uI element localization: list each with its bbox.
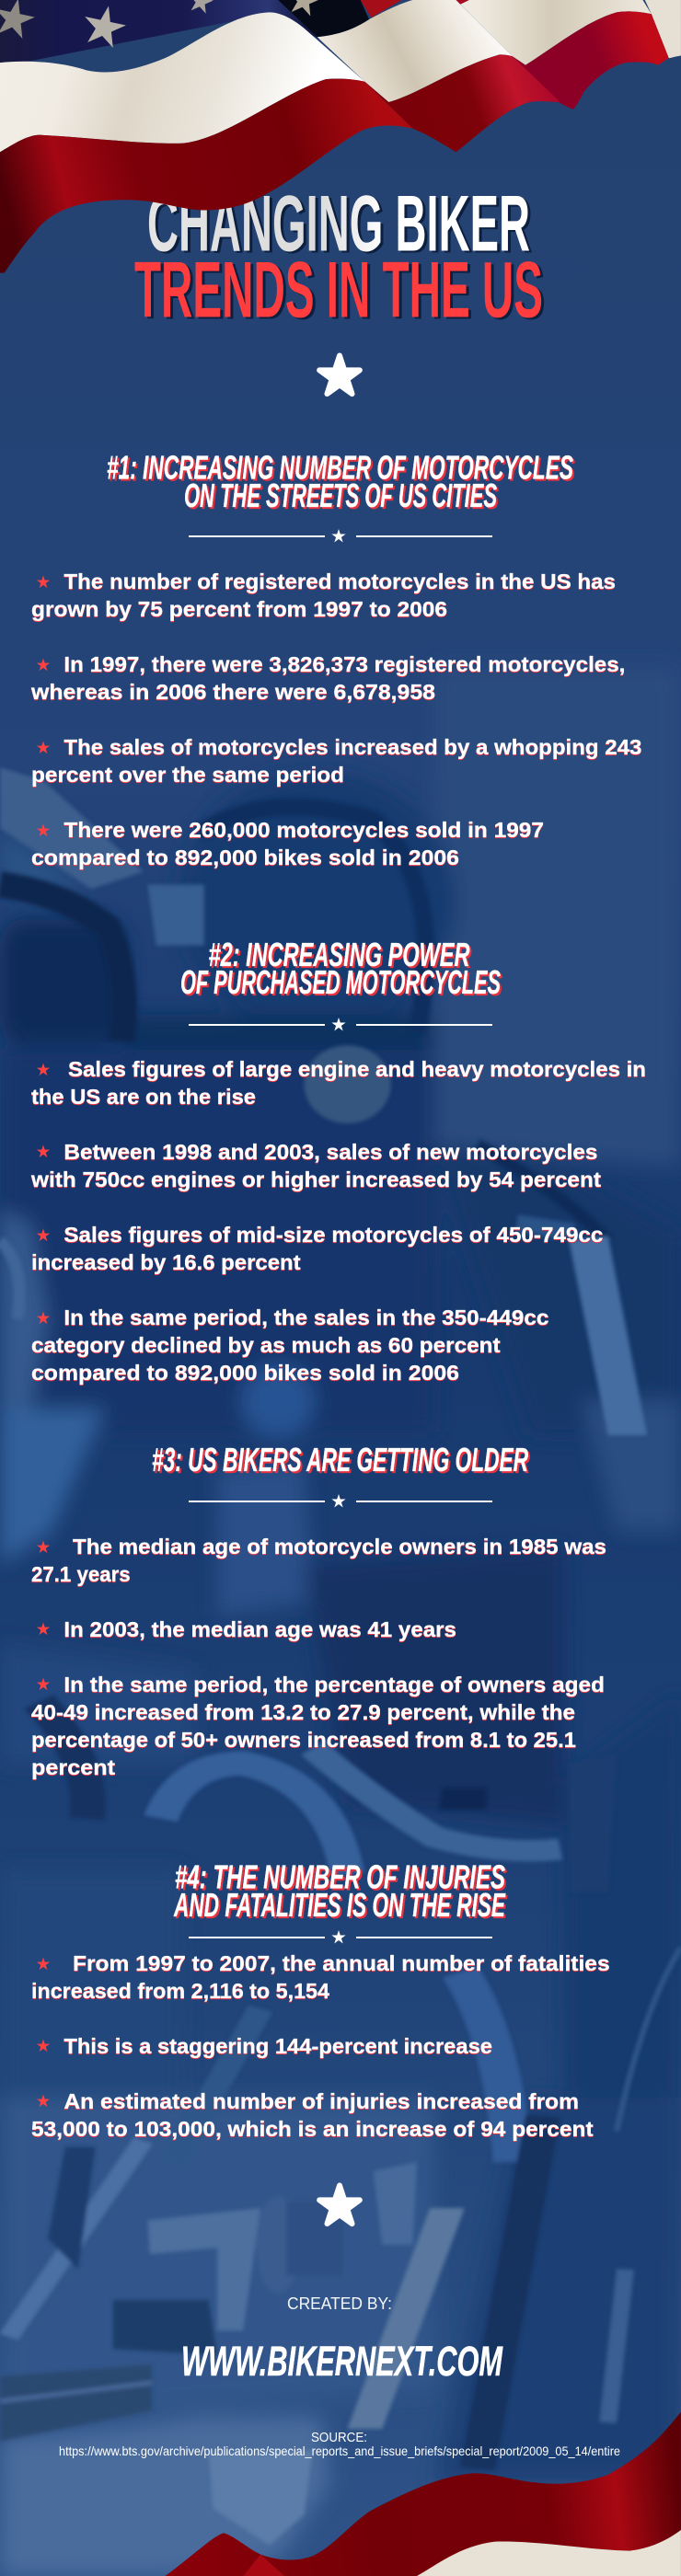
title [134,180,543,335]
heading 4: #4: THE NUMBER OF INJURIES [175,1858,505,1895]
source [59,2430,620,2458]
bullet 2.4: category declined by as much as 60 percent [31,1333,501,1357]
bullet 4.3: 53,000 to 103,000, which is an increase of 94 percent [31,2117,594,2141]
divider 1 [189,529,492,542]
bullet 1.3: The sales of motorcycles increased by a whopping 243 [63,735,641,759]
bullet 2.4: compared to 892,000 bikes sold in 2006 [31,1361,459,1385]
bullet 1.1: grown by 75 percent from 1997 to 2006 [31,597,447,621]
bullet 1.4 [31,818,544,869]
panel: section 4 [31,1858,610,2141]
heading 1 [107,449,573,514]
flag bottom banner [165,2412,681,2576]
big star bottom [319,2186,360,2224]
panel: section 3 [31,1441,606,1779]
bullet 2.4 [31,1305,548,1385]
bullet 1.4: compared to 892,000 bikes sold in 2006 [31,845,459,869]
bullet 1.3: percent over the same period [31,763,344,787]
bullet 1.4: There were 260,000 motorcycles sold in 1997 [63,818,544,842]
bullet 3.3: percentage of 50+ owners increased from 8.1 to 25.1 [31,1728,576,1752]
bullet 3.3: 40-49 increased from 13.2 to 27.9 percent, while the [31,1700,575,1724]
bullet 2.4: In the same period, the sales in the 350-449cc [63,1305,548,1329]
source: SOURCE: [311,2430,367,2445]
bullet 2.1: Sales figures of large engine and heavy motorcycles in [68,1057,646,1081]
heading 4 [173,1858,506,1924]
divider 2 [189,1018,492,1030]
bullet 3.3: percent [31,1755,115,1779]
bullet 2.2: with 750cc engines or higher increased by 54 percent [30,1167,601,1191]
bullet 4.2: This is a staggering 144-percent increase [63,2034,492,2058]
source: https://www.bts.gov/archive/publications/special_reports_and_issue_briefs/special_report/2009_05_14/entire [59,2444,620,2458]
bullet 1.2: In 1997, there were 3,826,373 registered motorcycles, [63,652,625,676]
bullet 2.1: the US are on the rise [31,1085,256,1109]
flag stars [0,0,322,50]
bullet 4.1: increased from 2,116 to 5,154 [31,1979,329,2003]
bullet 4.3 [31,2089,594,2141]
bullet 3.3 [31,1673,605,1779]
bullet 2.2 [30,1140,601,1191]
bullet 3.1: 27.1 years [31,1562,131,1586]
created by label: CREATED BY: [287,2294,392,2313]
bullet 2.3 [31,1223,603,1274]
bullet 1.2: whereas in 2006 there were 6,678,958 [30,680,435,704]
heading 2: #2: INCREASING POWER [208,936,469,973]
divider 3 [189,1494,492,1507]
divider 4 [189,1930,492,1943]
bullet 3.1 [31,1535,606,1586]
bullet 2.3: increased by 16.6 percent [31,1250,301,1274]
bullet 4.1 [31,1951,610,2003]
bullet 1.1 [31,569,616,621]
bullet 1.3 [31,735,641,787]
panel: section 2 [30,936,646,1385]
bullet 3.2: In 2003, the median age was 41 years [63,1617,456,1641]
panel: section 1 [30,449,641,869]
motorcycle detail shapes [0,767,681,2546]
bullet 2.2: Between 1998 and 2003, sales of new motorcycles [63,1140,597,1164]
bullet 1.1: The number of registered motorcycles in the US has [63,569,616,593]
bullet 2.3: Sales figures of mid-size motorcycles of 450-749cc [63,1223,603,1247]
bullet 2.1 [31,1057,646,1109]
bullet 3.1: The median age of motorcycle owners in 1985 was [73,1535,606,1558]
flag top banner [0,0,681,273]
website url: WWW.BIKERNEXT.COM [181,2338,503,2385]
bullet 1.2 [30,652,625,704]
bullet 4.3: An estimated number of injuries increased from [63,2089,579,2113]
bullet 3.3: In the same period, the percentage of owners aged [63,1673,605,1696]
big star top [319,355,360,394]
bullet 4.1: From 1997 to 2007, the annual number of fatalities [73,1951,610,1975]
heading 2 [180,936,501,1001]
